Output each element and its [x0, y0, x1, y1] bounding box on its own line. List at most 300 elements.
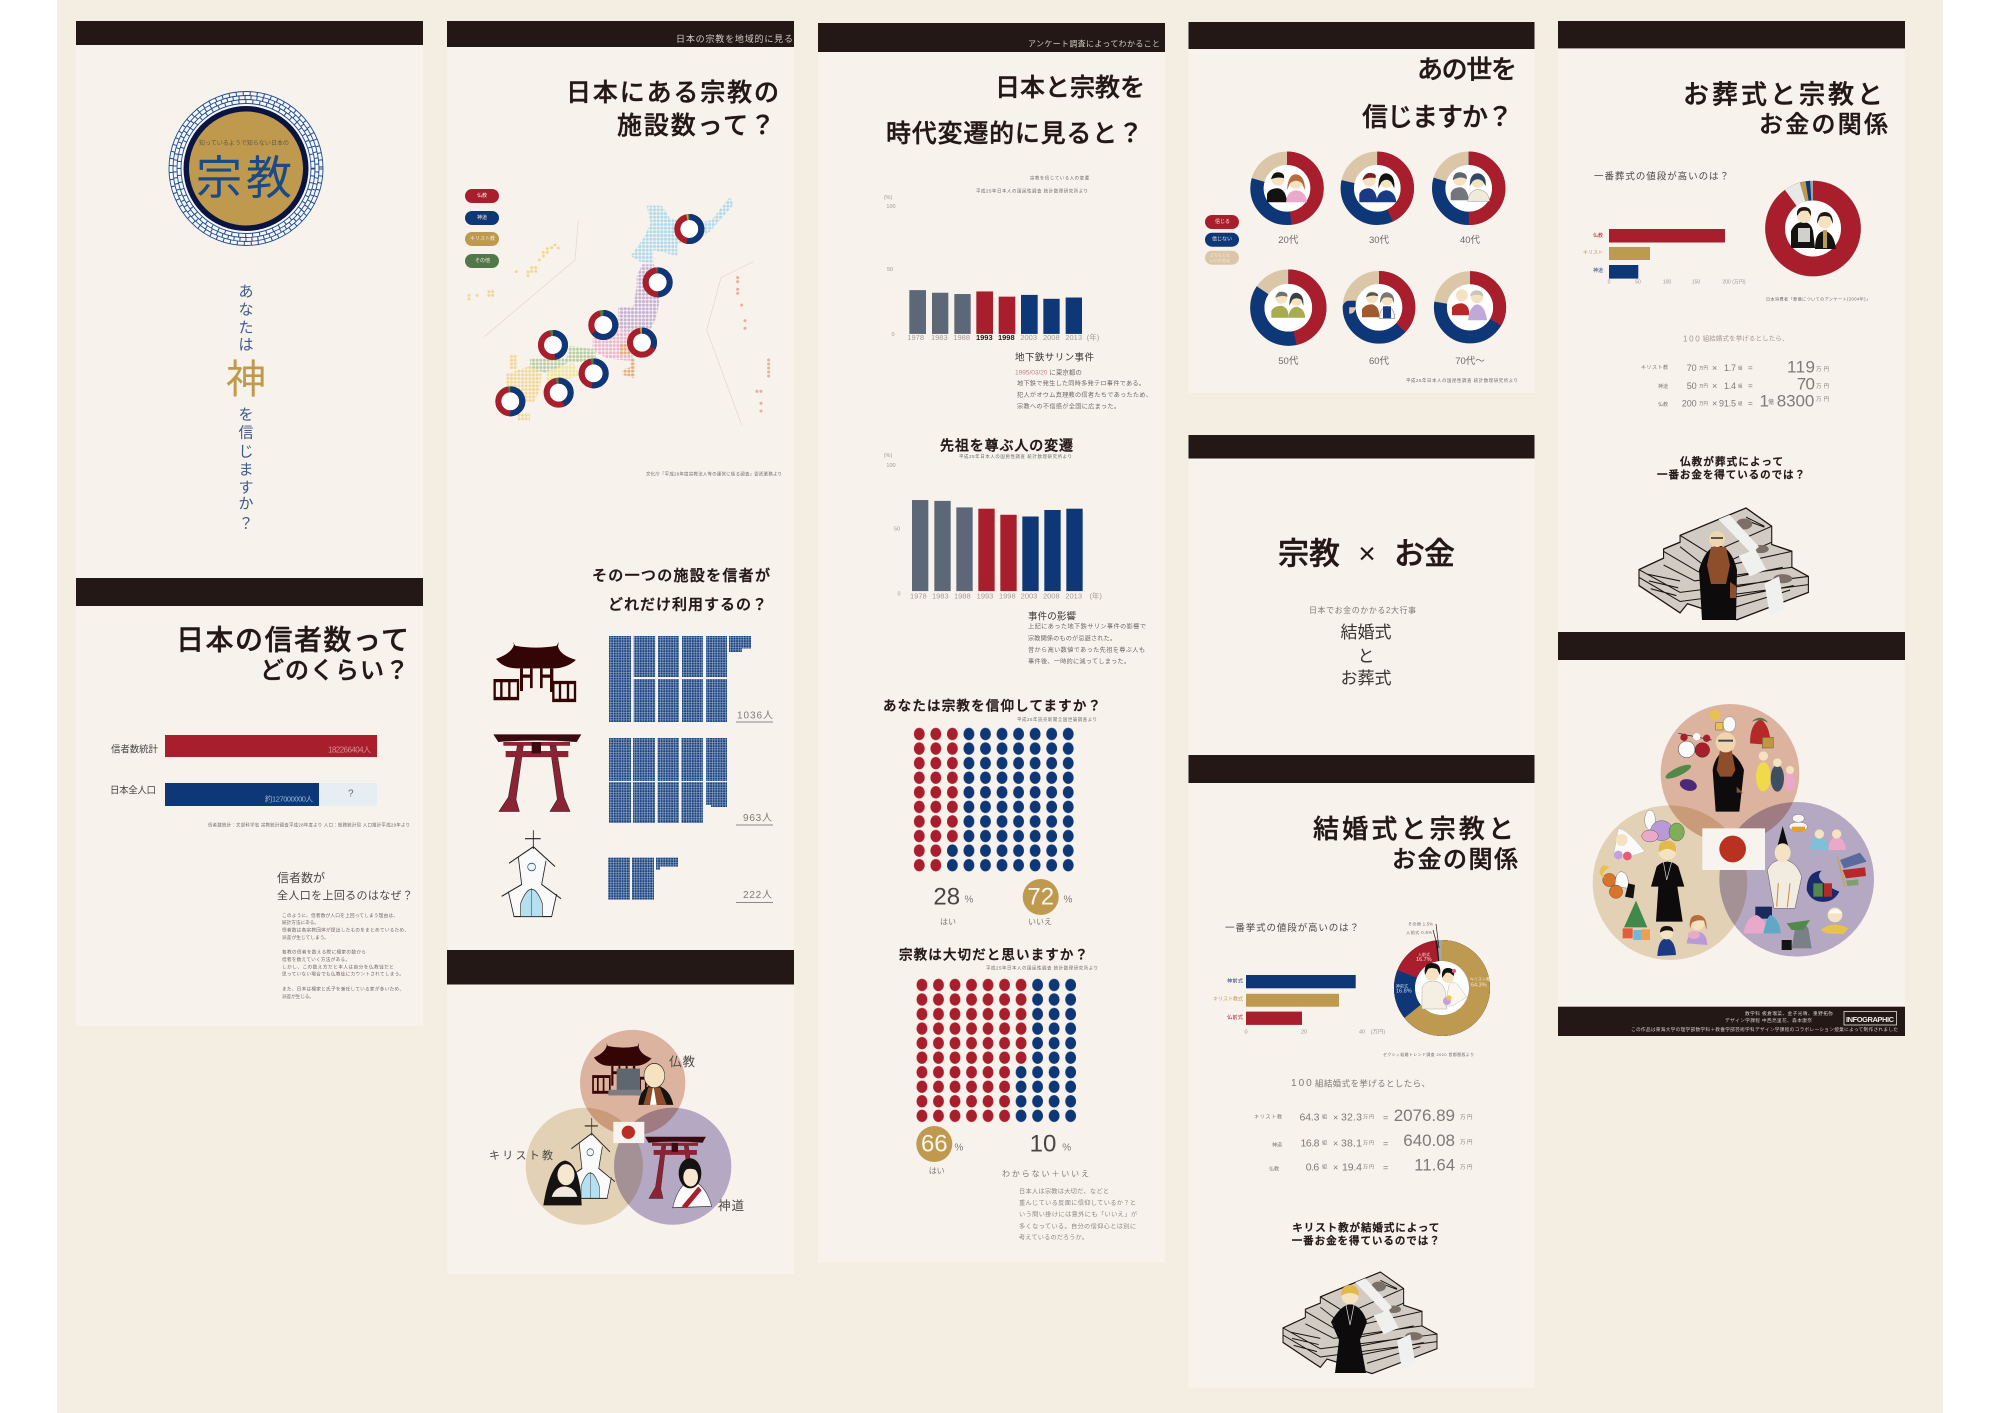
result: 66% yes: はい [929, 1166, 945, 1176]
result: 72% no [1023, 879, 1073, 926]
age labels: 60代 [1369, 356, 1390, 367]
icon: money pile [1639, 508, 1808, 620]
axis labels: ancestors chart: (年) [1089, 590, 1102, 600]
heading: 日本の信者数って [176, 624, 409, 656]
count: 222 [736, 890, 773, 902]
bar chart: wedding price: 仏前式 [1227, 1013, 1244, 1021]
vertical tagline: ？ [238, 516, 254, 532]
bar chart: believers and population: 約127000000人 [265, 794, 314, 804]
bar chart: ancestors [912, 500, 1083, 591]
bar chart: funeral price: 仏教 [1593, 232, 1603, 239]
heading [176, 624, 409, 684]
calculation table: × [1712, 363, 1717, 373]
header bar [1558, 21, 1905, 48]
closing text: いう問い掛けには意外にも「いいえ」が [1019, 1210, 1138, 1218]
panel: afterlife [1188, 22, 1534, 393]
calculation table: 1 [1760, 392, 1769, 410]
result: 28% yes: 28 [933, 884, 960, 910]
label: Shinto: 神道 [718, 1198, 744, 1213]
donut: 40s [1439, 158, 1499, 218]
footer bar: デザイン学課程 中西亮里花、森本康奈 [1725, 1017, 1812, 1024]
bar chart: funeral price: 100 [1663, 279, 1671, 285]
calculation heading: 組結婚式を挙げるとしたら、 [1315, 1079, 1430, 1089]
heading: × [1358, 538, 1376, 570]
footer bar: この作品は東海大学の理学部数学科＋教養学部芸術学科デザイン学課程のコラボレーション授業によって制作されました [1631, 1026, 1898, 1033]
header bar [447, 950, 794, 984]
vertical tagline: す [238, 480, 254, 496]
count: 222: 222人 [743, 890, 772, 901]
explanation text: 思っていない場合でも仏教徒にカウントされてしまう。 [282, 970, 404, 978]
calculation table: 1.7 [1724, 363, 1736, 373]
calculation table: = [1748, 382, 1753, 390]
panel: venn of religions in Japan [447, 950, 794, 1274]
figure: christian priest and events [1600, 810, 1707, 956]
bar chart: wedding price: 神前式 [1227, 976, 1244, 984]
result: 28% yes: はい [940, 918, 956, 926]
result: 28% yes: % [965, 894, 974, 906]
axis labels: ancestors chart: 1983 [932, 592, 949, 600]
closing text: 日本人は宗教は大切だ、などと [1019, 1188, 1109, 1196]
axis labels: believers chart: 2013 [1065, 333, 1082, 342]
legend: キリスト教 [470, 235, 495, 242]
header bar [76, 578, 423, 606]
axis labels: ancestors chart: (%) [884, 453, 892, 459]
source note: ゼクシィ結婚トレンド調査 2020 首都圏版より [1383, 1052, 1474, 1057]
source note: 平成25年日本人の国民性調査 統計数理研究所より [986, 964, 1098, 972]
calculation table: = [1383, 1112, 1388, 1122]
axis labels: ancestors chart: 50 [894, 526, 900, 532]
axis labels: believers chart: 2008 [1043, 333, 1060, 342]
calculation heading: 組結婚式を挙げるとしたら、 [1703, 334, 1788, 342]
calculation table [1254, 1106, 1473, 1174]
venn diagram [1593, 704, 1874, 960]
calculation heading: 100 [1683, 334, 1700, 344]
heading [1278, 536, 1455, 572]
calculation table: 万円 [1363, 1165, 1374, 1171]
vertical tagline: ま [238, 462, 254, 478]
calculation heading [1683, 334, 1788, 344]
heading [1362, 54, 1517, 132]
explanation text: 各教の信者を数える際に檀家の数から [282, 948, 366, 956]
conclusion [1292, 1221, 1440, 1247]
result: 10%: % [1062, 1142, 1071, 1154]
heading [566, 79, 779, 140]
bar chart: funeral price: 200 (万円) [1722, 279, 1746, 285]
donut labels [1396, 920, 1490, 995]
calculation table: 万円 [1460, 1114, 1473, 1121]
chart captions [976, 174, 1090, 194]
two events: 結婚式 [1340, 623, 1392, 642]
note: sarin attack [1015, 352, 1152, 410]
vertical tagline: を [238, 406, 254, 424]
bar chart: believers and population: 日本全人口 [110, 784, 156, 796]
calculation table: 640.08 [1403, 1131, 1455, 1150]
japanese flag [1702, 828, 1765, 870]
chart captions: 平成25年日本人の国民性調査 統計数理研究所より [976, 188, 1088, 194]
note: influence of the incident [1028, 610, 1146, 666]
axis labels: ancestors chart: 2013 [1065, 592, 1082, 600]
bar chart: believers over time [909, 290, 1082, 334]
calculation table: キリスト教 [1254, 1113, 1282, 1120]
note: sarin attack: 宗教への不信感が全国に広まった。 [1017, 402, 1120, 410]
bar chart: wedding price: (万円) [1371, 1028, 1385, 1035]
heading [886, 74, 1145, 148]
two events: お葬式 [1340, 669, 1392, 688]
two events [1340, 623, 1392, 688]
age labels: 30代 [1369, 235, 1390, 246]
heading [1313, 814, 1518, 874]
axis labels: believers chart: 0 [891, 332, 895, 338]
donut labels: 16.7% [1416, 957, 1432, 963]
calculation table: = [1383, 1163, 1388, 1173]
calculation table: 仏教 [1658, 401, 1668, 408]
explanation text: 派差が生じてしまう。 [282, 934, 329, 941]
calculation table: 19.4 [1342, 1162, 1362, 1174]
bar chart: funeral price: 神道 [1593, 267, 1603, 274]
icon: church [502, 830, 561, 917]
calculation table: 神道 [1272, 1142, 1282, 1149]
chart captions: 宗教を信じている人の変遷 [1030, 174, 1090, 182]
explanation text: 全人口を上回るのはなぜ？ [277, 888, 413, 902]
panel: religious events venn [1558, 632, 1905, 1036]
explanation text: 信者数が [277, 870, 325, 885]
explanation text [277, 870, 413, 1000]
donut: 20s [1257, 158, 1317, 218]
donut: funeral style share [1775, 191, 1851, 266]
axis labels: believers chart: 100 [886, 204, 896, 210]
vertical tagline [226, 284, 266, 532]
calculation table: 0.6 [1306, 1162, 1319, 1174]
source note: 文化庁「平成26年度宗教法人等の運営に係る調査」委託業務より [646, 470, 782, 478]
legend: どちらとも [1210, 252, 1230, 258]
calculation table: 万円 [1460, 1139, 1473, 1146]
explanation text: また、日本は檀家と氏子を兼任している家が多いため、 [282, 986, 404, 992]
bar chart: wedding price: 0 [1244, 1029, 1248, 1035]
calculation table: 11.64 [1414, 1156, 1455, 1174]
sub heading: importance: 宗教は大切だと思いますか？ [899, 947, 1088, 962]
legend: 神道 [477, 214, 487, 221]
header bar [1558, 632, 1905, 660]
calculation table: 50 [1687, 381, 1697, 391]
calculation table: 億 [1768, 398, 1774, 406]
calculation table: 組 [1738, 400, 1743, 407]
calculation table: 70 [1687, 363, 1697, 373]
heading: 宗教 [1278, 536, 1340, 572]
pictogram: temple 1036 people [609, 636, 751, 722]
axis labels: believers chart: 2003 [1020, 333, 1037, 342]
calculation table [1641, 358, 1829, 410]
calculation table: 70 [1797, 374, 1815, 394]
calculation table: 32.3 [1341, 1111, 1362, 1123]
label: Christianity: キリスト教 [489, 1149, 553, 1162]
vertical tagline: た [238, 320, 254, 336]
calculation table: 16.8 [1300, 1138, 1320, 1150]
calculation table: 万円 [1699, 366, 1708, 372]
conclusion [1657, 455, 1805, 481]
bar chart: wedding price [1213, 975, 1385, 1035]
axis labels: believers chart: 1988 [953, 333, 970, 342]
note: sarin attack: 犯人がオウム真理教の信者たちであったため、 [1017, 391, 1152, 399]
icon: torii [493, 734, 581, 811]
heading: あの世を [1417, 54, 1517, 84]
calculation table: 万円 [1816, 396, 1829, 403]
header bar [1188, 435, 1534, 458]
calculation table: 万円 [1699, 401, 1708, 407]
vertical tagline: 神 [226, 358, 266, 402]
note: influence of the incident: 事件後、一時的に減ってしまった。 [1028, 658, 1130, 666]
calculation table: 万円 [1699, 384, 1708, 390]
bar chart: funeral price: 150 [1692, 279, 1700, 285]
section label: アンケート調査によってわかること [1028, 38, 1160, 48]
dot chart: faith 28 / 72 [911, 727, 1076, 872]
calculation table: 万円 [1816, 366, 1829, 373]
figure: buddhist monk and events [1664, 710, 1795, 812]
bar chart: believers and population: ? [348, 788, 354, 800]
panel: believers vs population [76, 578, 423, 1026]
result: 66% yes: % [955, 1142, 964, 1154]
heading: 日本にある宗教の [566, 79, 779, 107]
calculation table: × [1333, 1138, 1338, 1148]
footer bar: 数学科 板倉瑠菜、金子光晴、重野拓弥 [1745, 1010, 1833, 1017]
axis labels: ancestors chart: 2008 [1043, 592, 1060, 600]
bar chart: funeral price [1583, 229, 1746, 285]
calculation heading: 100 [1291, 1078, 1312, 1089]
heading: お金の関係 [1759, 112, 1888, 138]
legend: 信じない [1212, 236, 1232, 243]
note: sarin attack: 地下鉄で発生した同時多発テロ事件である。 [1017, 380, 1145, 388]
source note: 平成25年読売新聞全国世論調査より [1017, 716, 1097, 723]
bar chart: funeral price: 50 [1635, 279, 1641, 285]
header bar [76, 21, 423, 45]
result: 10%: わからない＋いいえ [1002, 1170, 1089, 1178]
count: 1036: 1036人 [737, 710, 773, 722]
heading: 信じますか？ [1362, 102, 1513, 132]
calculation table: 64.3 [1300, 1111, 1320, 1123]
donut charts on map [498, 217, 701, 413]
subtitle: 日本でお金のかかる2大行事 [1309, 605, 1416, 615]
pictogram: shrine 963 people [609, 738, 727, 823]
legend [465, 189, 499, 268]
calculation table: × [1712, 398, 1717, 408]
calculation table: 万円 [1460, 1164, 1473, 1171]
axis labels: ancestors chart: 1993 [977, 592, 993, 600]
explanation text: しかし、この数え方だと本人は自分を仏教徒だと [282, 964, 394, 970]
heading: 時代変遷的に見ると？ [886, 120, 1143, 148]
header bar [447, 21, 794, 47]
icon: priest [1331, 1285, 1367, 1373]
panel: cover [76, 21, 423, 578]
result: 28% yes [933, 884, 974, 926]
legend: 仏教 [477, 192, 487, 199]
axis labels: ancestors chart: 1978 [910, 592, 927, 600]
donut labels: 神前式 [1396, 982, 1408, 988]
axis labels: ancestors chart: 0 [897, 592, 901, 598]
dot map of Japan [467, 197, 770, 425]
closing text: 多くなっている。自分の信仰心とは別に [1019, 1222, 1136, 1230]
axis labels: believers chart: 1978 [907, 333, 924, 342]
heading: お金の関係 [1392, 846, 1518, 874]
sub heading [592, 566, 770, 614]
panel: surveys over time [818, 23, 1165, 1262]
calculation table: 200 [1682, 398, 1697, 408]
heading: お金 [1394, 536, 1455, 572]
vertical tagline: あ [238, 284, 254, 300]
footer bar [1558, 1007, 1905, 1036]
donut: 30s [1347, 158, 1407, 218]
result: 66% yes: 66 [921, 1130, 948, 1158]
donut labels: 人前式 [1418, 951, 1430, 957]
calculation table: = [1383, 1138, 1388, 1148]
calculation table: 万円 [1363, 1114, 1374, 1120]
calculation table: 38.1 [1341, 1138, 1362, 1150]
sub heading: ancestors: 先祖を尊ぶ人の変遷 [940, 438, 1073, 454]
axis labels: believers chart: 1983 [931, 333, 948, 342]
sub heading: その一つの施設を信者が [592, 566, 770, 584]
legend: その他 [475, 257, 490, 264]
age labels [1278, 235, 1485, 367]
source note: 日本消費者「葬儀についてのアンケート(2004年)」 [1766, 296, 1870, 302]
source note: 信者数統計：文部科学省 宗教統計調査平成28年度より 人口：総務統計局 人口推計平成29年より [208, 822, 410, 828]
donut: 60s [1349, 278, 1409, 337]
result: 66% yes [916, 1126, 964, 1176]
axis labels: believers chart [884, 195, 1100, 342]
age labels: 20代 [1278, 235, 1299, 246]
calculation table: 組 [1322, 1140, 1327, 1146]
explanation text: 信者数は各宗教団体が提出したものをまとめているため、 [282, 926, 409, 934]
axis labels: believers chart: 1998 [998, 333, 1015, 342]
result: 10%: 10 [1030, 1130, 1056, 1158]
conclusion: 一番お金を得ているのでは？ [1657, 468, 1805, 481]
pictogram: church 222 people [608, 858, 678, 900]
calculation table: キリスト教 [1641, 364, 1668, 371]
bar chart: funeral price: キリスト [1583, 250, 1603, 256]
vertical tagline: じ [238, 444, 254, 460]
dot chart: importance 66 / 10 [914, 978, 1079, 1123]
conclusion: 仏教が葬式によって [1680, 455, 1783, 468]
panel: facilities map [447, 21, 794, 950]
calculation table: 組 [1738, 364, 1743, 372]
result: 72% no: いいえ [1028, 918, 1052, 926]
axis labels: believers chart: 1993 [976, 333, 993, 342]
vertical tagline: な [238, 302, 254, 318]
explanation text: 統計方法にある。 [282, 919, 319, 926]
result: 72% no: % [1064, 894, 1073, 906]
calculation table: 仏教 [1269, 1166, 1279, 1173]
heading [1683, 80, 1888, 138]
bar chart: wedding price: 40 [1359, 1029, 1365, 1035]
sub heading: どれだけ利用するの？ [608, 596, 767, 614]
footer bar: INFOGRAPHIC [1846, 1015, 1895, 1024]
calculation table: × [1333, 1163, 1338, 1173]
panel: funeral [1558, 21, 1905, 632]
calculation table: 2076.89 [1394, 1106, 1455, 1125]
axis labels: ancestors chart: 2003 [1021, 592, 1037, 600]
chart question: 一番挙式の値段が高いのは？ [1225, 922, 1359, 934]
section label: 日本の宗教を地域的に見る [676, 33, 793, 44]
note: influence of the incident: 宗教関係のものが忌避された。 [1028, 634, 1116, 642]
explanation text: 信者を数えていく方法がある。 [282, 956, 350, 963]
donut labels: キリスト教 [1470, 976, 1490, 982]
age labels: 40代 [1460, 235, 1481, 246]
calculation table: 万円 [1363, 1140, 1374, 1146]
calculation table: = [1748, 364, 1753, 372]
heading: どのくらい？ [260, 658, 409, 684]
age labels: 50代 [1278, 356, 1299, 367]
icon: monk [1699, 531, 1737, 620]
calculation table: 1.4 [1724, 381, 1736, 391]
donut labels: 人前式 0.6% [1406, 929, 1432, 936]
calculation table: 8300 [1777, 392, 1814, 410]
result: 72% no: 72 [1027, 884, 1054, 910]
source note: 平成25年日本人の国民性調査 統計数理研究所より [1406, 377, 1518, 384]
icon: money pile [1283, 1272, 1437, 1374]
note: influence of the incident: 事件の影響 [1028, 610, 1076, 622]
note: influence of the incident: 上記にあった地下鉄サリン事件の影響で [1028, 622, 1146, 630]
bar chart: believers and population: 182266404人 [328, 746, 371, 754]
axis labels: believers chart: 50 [887, 267, 893, 273]
calculation table: 組 [1738, 382, 1743, 390]
heading: 施設数って？ [617, 112, 775, 140]
emblem [168, 91, 324, 246]
donut: wedding style share [1404, 924, 1480, 1026]
heading: 日本と宗教を [995, 74, 1145, 102]
bar chart: funeral price: 0 [1608, 279, 1611, 285]
legend [1205, 215, 1239, 265]
donut labels: その他 1.5% [1408, 920, 1433, 928]
legend: 信じる [1215, 218, 1230, 225]
calculation table: 組 [1322, 1164, 1327, 1171]
vertical tagline: は [238, 336, 254, 354]
conclusion: キリスト教が結婚式によって [1292, 1221, 1439, 1234]
calculation table: 119 [1787, 358, 1815, 376]
venn diagram [526, 1030, 731, 1225]
panel: religion and money [1188, 435, 1534, 755]
vertical tagline: 信 [238, 424, 254, 442]
donut labels: 16.8% [1396, 989, 1412, 995]
donut: 70s and over [1440, 278, 1500, 337]
calculation table: × [1712, 381, 1717, 391]
conclusion: 一番お金を得ているのでは？ [1292, 1234, 1440, 1247]
note: influence of the incident: 昔から高い数値であった先祖を尊ぶ人も [1028, 646, 1145, 654]
closing text [1019, 1188, 1138, 1242]
emblem: 宗教 [196, 152, 292, 204]
bar chart: wedding price: 20 [1301, 1029, 1307, 1035]
explanation text: このように、信者数が人口を上回ってしまう理由は、 [282, 912, 398, 919]
axis labels: ancestors chart: 1988 [954, 592, 971, 600]
result: 10% [1002, 1130, 1089, 1178]
vertical tagline: か [238, 496, 254, 512]
calculation table: = [1748, 399, 1753, 408]
closing text: 重んじている反面に信仰しているか？と [1019, 1199, 1136, 1207]
bar chart: believers and population [110, 735, 377, 806]
axis labels: believers chart: (年) [1087, 332, 1100, 342]
bar chart: wedding price: キリスト教式 [1213, 996, 1243, 1003]
icon: wedding couple [1422, 963, 1467, 1009]
header bar [1188, 22, 1534, 49]
label: Buddhism: 仏教 [669, 1054, 695, 1069]
header bar [1188, 755, 1534, 783]
donut: 50s [1257, 277, 1319, 339]
note: sarin attack: 地下鉄サリン事件 [1015, 352, 1094, 364]
bar chart: believers and population: 信者数統計 [111, 744, 158, 756]
calculation table: 組 [1322, 1113, 1327, 1120]
icon: temple [495, 642, 576, 700]
heading: お葬式と宗教と [1683, 80, 1883, 110]
explanation text: 派差が生じる。 [282, 993, 314, 1000]
legend: いいかねる [1210, 257, 1230, 263]
icon: mourners [1791, 207, 1836, 249]
emblem: 知っているようで知らない日本の [199, 139, 289, 147]
